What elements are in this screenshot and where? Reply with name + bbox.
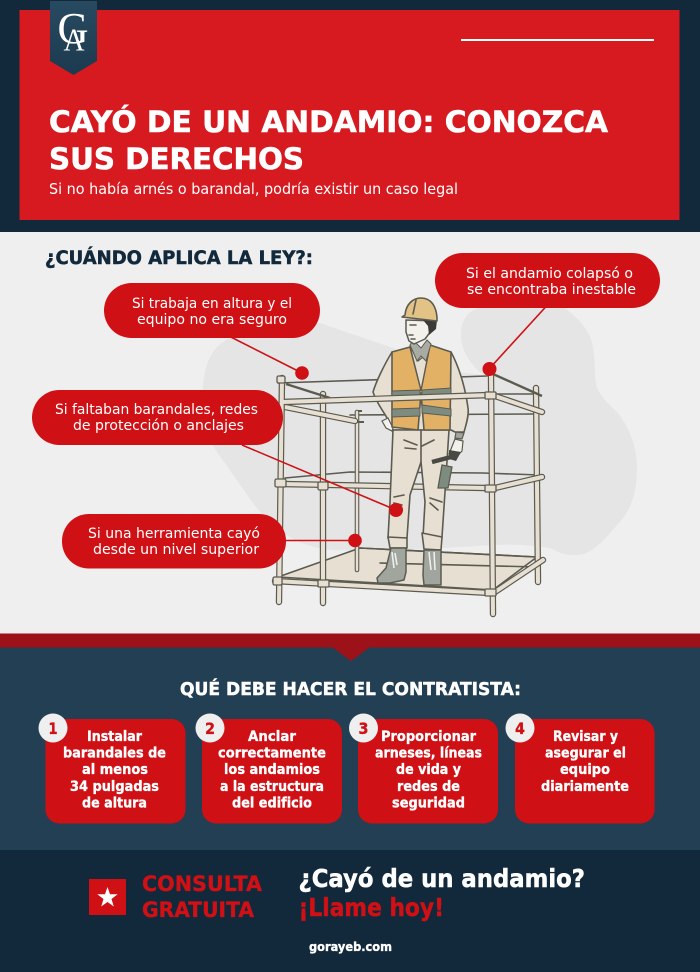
badge 2 [196, 714, 224, 742]
section heading: contractor: QUÉ DEBE HACER EL CONTRATISTA: [180, 678, 521, 700]
badge 4 [506, 714, 534, 742]
badge 4: 4 [515, 719, 525, 738]
badge 1 [38, 714, 68, 742]
scaffold front tubes [273, 376, 543, 614]
section heading: when: ¿CUÁNDO APLICA LA LEY?: [45, 247, 313, 269]
callout: falling tool [62, 514, 286, 568]
card 2: los andamios [224, 762, 320, 778]
callout: missing guardrails: Si faltaban barandales, redes [55, 402, 258, 418]
scaffold platform [278, 548, 537, 590]
scaffold rear tubes [278, 374, 542, 603]
header panel [0, 0, 700, 232]
free consultation text [142, 872, 263, 922]
free consultation text: CONSULTA [142, 872, 263, 896]
card 1: 34 pulgadas [70, 779, 159, 795]
callout: unsafe equipment: equipo no era seguro [137, 312, 287, 328]
worker [373, 298, 468, 585]
hard hat [402, 298, 437, 321]
card 2 [196, 714, 342, 824]
vest reflective bands [392, 388, 451, 417]
card 3: Proporcionar [381, 729, 477, 745]
website: gorayeb.com [309, 940, 392, 954]
title [49, 103, 608, 176]
callout: collapsed scaffold: Si el andamio colapsó o [466, 266, 633, 282]
card 3: arneses, líneas [375, 746, 482, 762]
card 1 [38, 714, 186, 824]
card 4: diariamente [541, 779, 629, 795]
trouser cuffs [388, 533, 442, 550]
callout: unsafe equipment [104, 283, 320, 338]
card 3 [349, 714, 498, 824]
header accent line [461, 39, 654, 41]
panel: contractor duties [0, 647, 700, 850]
card 1: de altura [82, 796, 147, 812]
panel: when the law applies [0, 232, 700, 633]
card 2: Anclar [248, 729, 297, 745]
card 4: equipo [560, 762, 610, 778]
left hand [382, 418, 393, 431]
callout: missing guardrails: de protección o anclajes [73, 418, 244, 434]
connector lines and dots [217, 300, 552, 547]
footer call to action [298, 864, 585, 922]
callout: falling tool: desde un nivel superior [93, 542, 259, 558]
illustration: worker on scaffold [273, 298, 543, 614]
title: SUS DERECHOS [49, 142, 304, 176]
subtitle: Si no había arnés o barandal, podría existir un caso legal [49, 180, 458, 198]
header red banner [20, 10, 680, 220]
worker trousers [388, 430, 449, 538]
card 1: barandales de [63, 746, 166, 762]
logo ribbon: A [64, 22, 84, 58]
card 3: seguridad [392, 796, 465, 812]
callout: collapsed scaffold: se encontraba inestable [467, 282, 636, 298]
title: CAYÓ DE UN ANDAMIO: CONOZCA [49, 103, 608, 139]
badge 2: 2 [205, 719, 215, 738]
glove and cuff [455, 432, 464, 439]
high visibility vest [392, 345, 451, 430]
card 2: del edificio [232, 796, 312, 812]
icon: star badge [89, 879, 126, 915]
card 1: al menos [82, 762, 148, 778]
boots [377, 548, 441, 585]
hammer [432, 457, 451, 462]
callout: unsafe equipment: Si trabaja en altura y el [132, 296, 292, 312]
card 4 [506, 714, 654, 824]
logo ribbon [50, 1, 97, 75]
background blob [203, 307, 637, 555]
card 3: redes de [397, 779, 460, 795]
card 2: a la estructura [220, 779, 324, 795]
callout: missing guardrails [32, 390, 283, 445]
panel: footer [0, 850, 700, 972]
card 4: asegurar el [545, 746, 626, 762]
shirt collar [410, 345, 430, 390]
callout: collapsed scaffold [435, 253, 660, 308]
card 4: Revisar y [553, 729, 618, 745]
callout: falling tool: Si una herramienta cayó [88, 526, 260, 542]
logo ribbon: G [58, 4, 88, 53]
footer call to action: ¡Llame hoy! [298, 893, 444, 922]
card 2: correctamente [218, 746, 326, 762]
card 3: de vida y [396, 762, 461, 778]
red divider band with pointer [0, 634, 700, 661]
badge 3: 3 [358, 719, 368, 738]
worker head [406, 320, 436, 344]
tool holster [438, 465, 452, 488]
worker arms [373, 352, 468, 432]
badge 1: 1 [48, 719, 58, 738]
footer call to action: ¿Cayó de un andamio? [298, 864, 585, 893]
badge 3 [349, 714, 378, 742]
card 1: Instalar [87, 729, 143, 745]
free consultation text: GRATUITA [142, 898, 255, 922]
